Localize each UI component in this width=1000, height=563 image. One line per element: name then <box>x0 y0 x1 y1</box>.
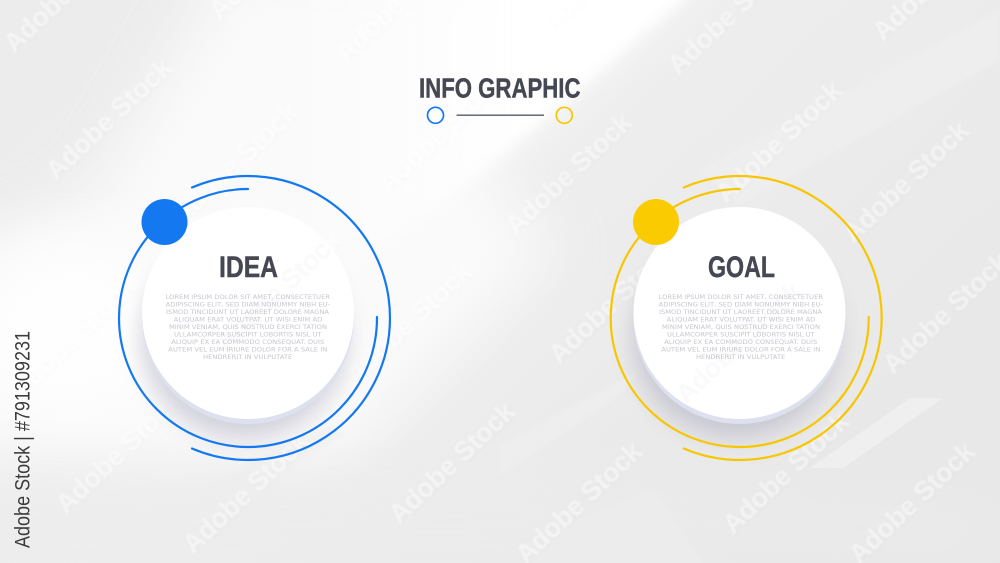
disc shadow <box>632 238 838 438</box>
text block: goal: ULLAMCORPER SUSCIPIT LOBORTIS NISL UT <box>667 333 815 339</box>
watermarks (background layer): Adobe Stock <box>49 385 188 519</box>
text block: idea: AUTEM VEL EUM IRIURE DOLOR FOR A SALE IN <box>168 348 327 354</box>
watermarks (background layer): Adobe Stock <box>165 96 304 230</box>
text block: idea: ULLAMCORPER SUSCIPIT LOBORTIS NISL UT <box>174 333 322 339</box>
watermarks (background layer): Adobe Stock <box>339 255 478 389</box>
watermarks (background layer): Adobe Stock <box>39 51 178 185</box>
text block: idea: ADIPISCING ELIT, SED DIAM NONUMMY NIBH EU- <box>166 303 330 309</box>
text block: idea: MINIM VENIAM, QUIS NOSTRUD EXERCI TATION <box>169 325 327 331</box>
watermarks (background layer): Adobe Stock <box>176 425 315 559</box>
watermarks (background layer): Adobe Stock <box>669 275 808 409</box>
text block: goal: ALIQUAM ERAT VOLUTPAT. UT WISI ENIM AD <box>667 318 816 324</box>
title ornament <box>428 107 572 123</box>
heading: idea: IDEA <box>219 251 278 284</box>
panel: idea <box>119 176 390 460</box>
icon: yellow ring <box>556 107 572 123</box>
icon: blue ring <box>428 107 444 123</box>
disc rim <box>634 212 846 424</box>
disc rim <box>142 212 354 424</box>
white disc <box>142 207 354 419</box>
stock id label: Adobe Stock | #791309231 <box>12 331 34 548</box>
text block: goal: ALIQUIP EX EA COMMODO CONSEQUAT. DUIS <box>664 340 818 346</box>
text block: goal: LOREM IPSUM DOLOR SIT AMET, CONSECTETUER <box>659 295 823 301</box>
watermarks over discs: Adobe Stock <box>209 223 348 357</box>
text block: idea: LOREM IPSUM DOLOR SIT AMET, CONSECTETUER <box>166 295 330 301</box>
watermarks over discs: Adobe Stock <box>669 275 808 409</box>
watermarks (background layer): Adobe Stock <box>716 405 855 539</box>
text block: goal: AUTEM VEL EUM IRIURE DOLOR FOR A SALE IN <box>661 348 820 354</box>
text block: goal <box>659 295 823 361</box>
watermarks over discs: Adobe Stock <box>165 96 304 230</box>
text block: goal: HENDRERIT IN VULPUTATE <box>696 355 786 361</box>
watermarks (background layer): Adobe Stock <box>499 106 638 240</box>
watermarks (background layer): Adobe Stock <box>542 235 681 369</box>
ring arc: inner <box>119 189 377 447</box>
panel: goal <box>611 176 882 460</box>
dot <box>633 199 679 245</box>
dot <box>142 199 188 245</box>
watermarks (background layer): Adobe Stock <box>372 64 511 198</box>
text block: goal: ISMOD TINCIDUNT UT LAOREET DOLORE MAGNA <box>659 310 822 316</box>
text block: goal: ADIPISCING ELIT, SED DIAM NONUMMY NIBH EU- <box>659 303 823 309</box>
text block: goal: MINIM VENIAM, QUIS NOSTRUD EXERCI TATION <box>662 325 820 331</box>
watermarks (background layer): Adobe Stock <box>709 74 848 208</box>
heading: goal: GOAL <box>708 251 775 284</box>
ring arc: outer <box>192 176 390 460</box>
divider line <box>456 114 544 116</box>
white disc <box>634 207 846 419</box>
ring arc: inner <box>611 189 869 447</box>
ring arc: outer <box>684 176 882 460</box>
watermarks (background layer): Adobe Stock <box>836 114 975 248</box>
watermarks (background layer): Adobe Stock <box>382 395 521 529</box>
text block: idea: ALIQUAM ERAT VOLUTPAT. UT WISI ENIM AD <box>174 318 323 324</box>
watermarks (background layer): Adobe Stock <box>209 223 348 357</box>
text block: idea: ISMOD TINCIDUNT UT LAOREET DOLORE MAGNA <box>166 310 329 316</box>
watermarks over discs <box>165 96 808 409</box>
disc shadow <box>141 238 347 438</box>
text block: idea <box>166 295 330 361</box>
watermarks (background layer): Adobe Stock <box>4 270 143 404</box>
text block: idea: HENDRERIT IN VULPUTATE <box>203 355 293 361</box>
text block: idea: ALIQUIP EX EA COMMODO CONSEQUAT. DUIS <box>171 340 325 346</box>
title: INFO GRAPHIC <box>419 72 581 103</box>
